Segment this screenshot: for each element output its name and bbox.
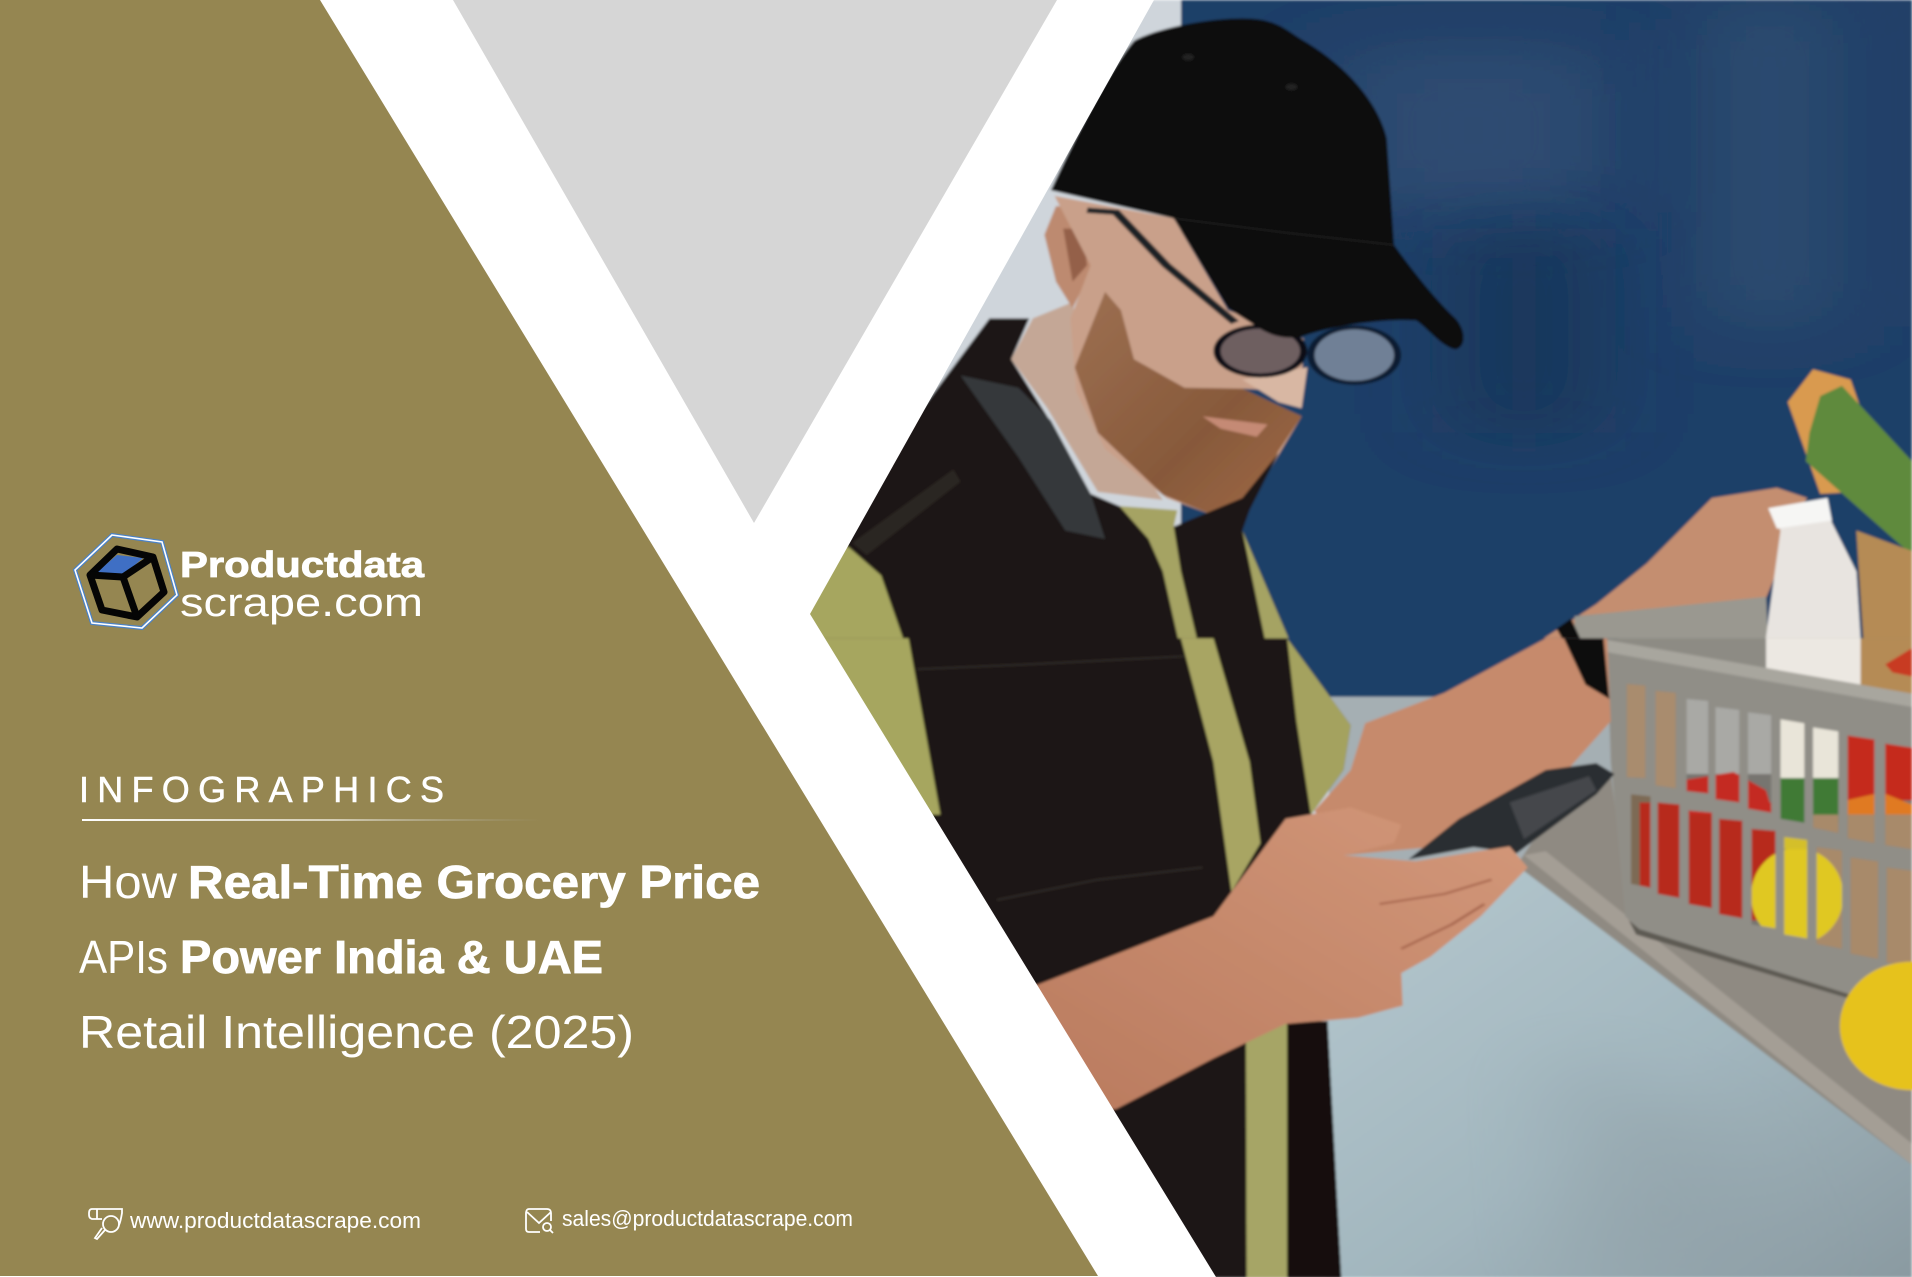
torso underlay: [907, 636, 1340, 1277]
title: Power India & UAE: [180, 931, 603, 983]
photo: man checking grocery prices on a phone beside a basket: [773, 0, 1912, 1277]
arm, upper: [1315, 638, 1611, 855]
phone: [1408, 763, 1614, 859]
glasses: [1087, 210, 1235, 322]
torso underlay: [846, 316, 1280, 641]
icon: envelope with magnifier: [526, 1209, 553, 1233]
contact: website: www.productdatascrape.com: [129, 1208, 421, 1233]
hand holding phone: [1026, 807, 1528, 1109]
lemon on counter: [1840, 962, 1912, 1090]
icon: browser with magnifier: [89, 1209, 122, 1239]
hand on bottle: [1539, 488, 1807, 642]
face: [1055, 196, 1304, 515]
logo wordmark: Productdata: [180, 544, 425, 585]
basket interior above rim: [1606, 637, 1768, 669]
counter top: [1517, 774, 1912, 1165]
vest sheen: [961, 376, 1105, 539]
panel: olive left triangle: [0, 0, 1098, 1276]
title: [79, 856, 760, 1058]
heading: INFOGRAPHICS: INFOGRAPHICS: [79, 769, 444, 810]
neck and ear: [1011, 302, 1163, 500]
contact: email: sales@productdatascrape.com: [562, 1206, 853, 1231]
panel: grey top triangle: [453, 0, 1057, 523]
title: Retail Intelligence (2025): [79, 1006, 634, 1058]
logo wordmark: scrape.com: [180, 581, 423, 625]
title: Real-Time Grocery Price: [188, 856, 760, 908]
counter front: [1325, 865, 1912, 1277]
shirt: [1120, 506, 1198, 642]
title: How: [79, 856, 178, 908]
shirt sleeve: [1287, 638, 1351, 815]
divider under heading: [82, 819, 542, 821]
logo icon: hexagon cube: [75, 535, 177, 628]
beard: [1075, 292, 1302, 515]
basket contents seen through the slots: [1625, 681, 1912, 969]
bag, leek and bottle: [1786, 367, 1862, 496]
logo wordmark: [180, 544, 425, 625]
logo: [75, 535, 425, 628]
basket body: [1606, 652, 1912, 959]
title: APIs: [79, 931, 168, 983]
cap: [1051, 18, 1464, 349]
